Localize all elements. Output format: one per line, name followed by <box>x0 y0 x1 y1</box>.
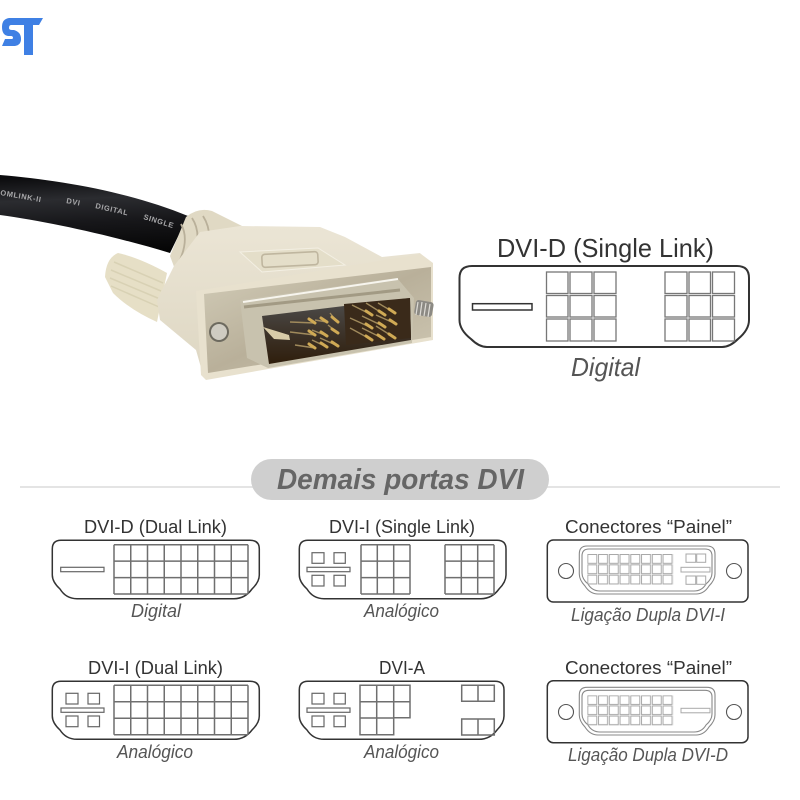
panel: DVI-A <box>299 657 504 762</box>
contact pins <box>263 303 396 348</box>
section heading: Demais portas DVI <box>20 459 780 500</box>
panel: DVI-D Dual Link <box>52 516 259 621</box>
heading: DVI-D Single Link: DVI-D (Single Link) <box>497 233 714 263</box>
cable: SINGLE <box>142 212 175 230</box>
panel: Conectores Painel DVI-D: Conectores “Painel” <box>565 657 732 678</box>
front plate <box>196 254 433 380</box>
photo: DVI cable and connector <box>0 175 434 380</box>
metal shell <box>240 278 414 368</box>
section heading: Demais portas DVI: Demais portas DVI <box>277 464 525 496</box>
logo: ST <box>2 18 43 55</box>
panel: Conectores Painel DVI-D <box>547 657 748 765</box>
panel: DVI-A: DVI-A <box>379 657 426 678</box>
connector body <box>157 226 432 378</box>
panel: DVI-I Dual Link: DVI-I (Dual Link) <box>88 657 223 678</box>
panel: DVI-D Dual Link: Digital <box>131 600 182 621</box>
cable <box>0 175 188 253</box>
screws <box>209 300 434 342</box>
thumbscrew <box>105 253 167 322</box>
caption: Digital: Digital <box>571 352 641 382</box>
cable: DVI <box>66 196 81 208</box>
panel: DVI-D Dual Link: DVI-D (Dual Link) <box>84 516 227 537</box>
panel: DVI-I Single Link <box>299 516 506 621</box>
panel: Conectores Painel DVI-I: Ligação Dupla DVI-I <box>571 604 725 625</box>
cable: DIGITAL <box>95 201 129 218</box>
panel: DVI-I Single Link: Analógico <box>363 600 439 621</box>
panel: DVI-I Dual Link: Analógico <box>116 741 193 762</box>
panel: Conectores Painel DVI-I: Conectores “Painel” <box>565 516 732 537</box>
panel: Conectores Painel DVI-I <box>547 516 748 625</box>
strain relief <box>170 210 246 272</box>
panel: DVI-A: Analógico <box>363 741 439 762</box>
panel: Conectores Painel DVI-D: Ligação Dupla DVI-D <box>568 744 728 765</box>
diagram: DVI-D Single Link <box>460 266 749 347</box>
panel: DVI-I Single Link: DVI-I (Single Link) <box>329 516 475 537</box>
cable: OMLINK-II <box>0 188 42 204</box>
panel: DVI-I Dual Link <box>52 657 259 762</box>
